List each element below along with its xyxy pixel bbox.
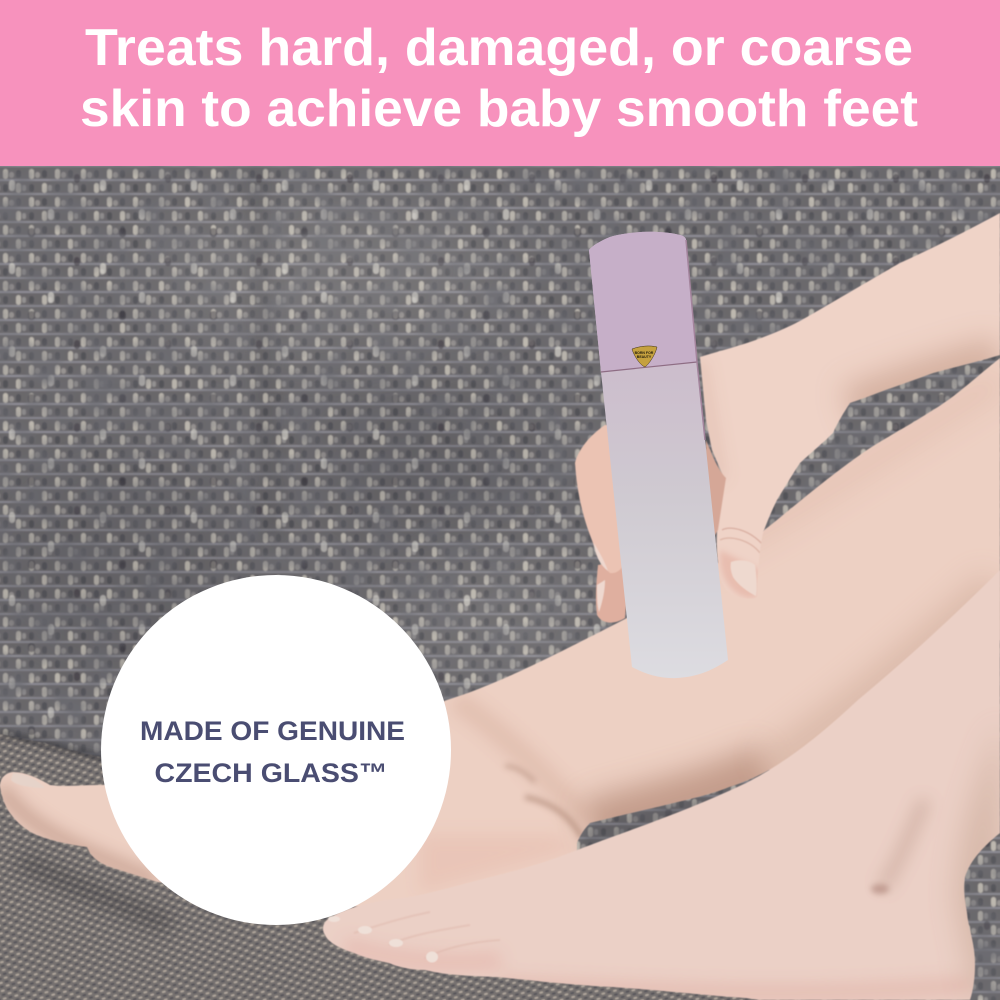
header banner bbox=[0, 0, 1000, 166]
thumb nail bbox=[731, 560, 757, 596]
logo sticker: BORN FOR bbox=[635, 351, 654, 355]
front leg with foot bbox=[300, 560, 1000, 1000]
title: Treats hard, damaged, or coarse bbox=[85, 19, 913, 77]
back leg with foot bbox=[0, 340, 1000, 940]
callout circle bbox=[101, 575, 451, 925]
title bbox=[80, 19, 918, 138]
title: skin to achieve baby smooth feet bbox=[80, 80, 918, 138]
logo sticker bbox=[632, 346, 657, 367]
product: glass foot file bbox=[589, 232, 728, 678]
toenails bbox=[328, 916, 438, 962]
logo sticker: BEAUTY bbox=[637, 355, 652, 359]
callout text: MADE OF GENUINE bbox=[140, 716, 405, 746]
callout text: CZECH GLASS™ bbox=[154, 758, 388, 788]
lower seat fabric bbox=[0, 733, 800, 1000]
large soft light and dark patches in the cushion bbox=[0, 450, 250, 670]
hand and forearm bbox=[690, 200, 1000, 610]
fingers behind the file bbox=[575, 425, 630, 623]
left toe nail bbox=[11, 773, 45, 788]
callout text bbox=[140, 716, 405, 788]
